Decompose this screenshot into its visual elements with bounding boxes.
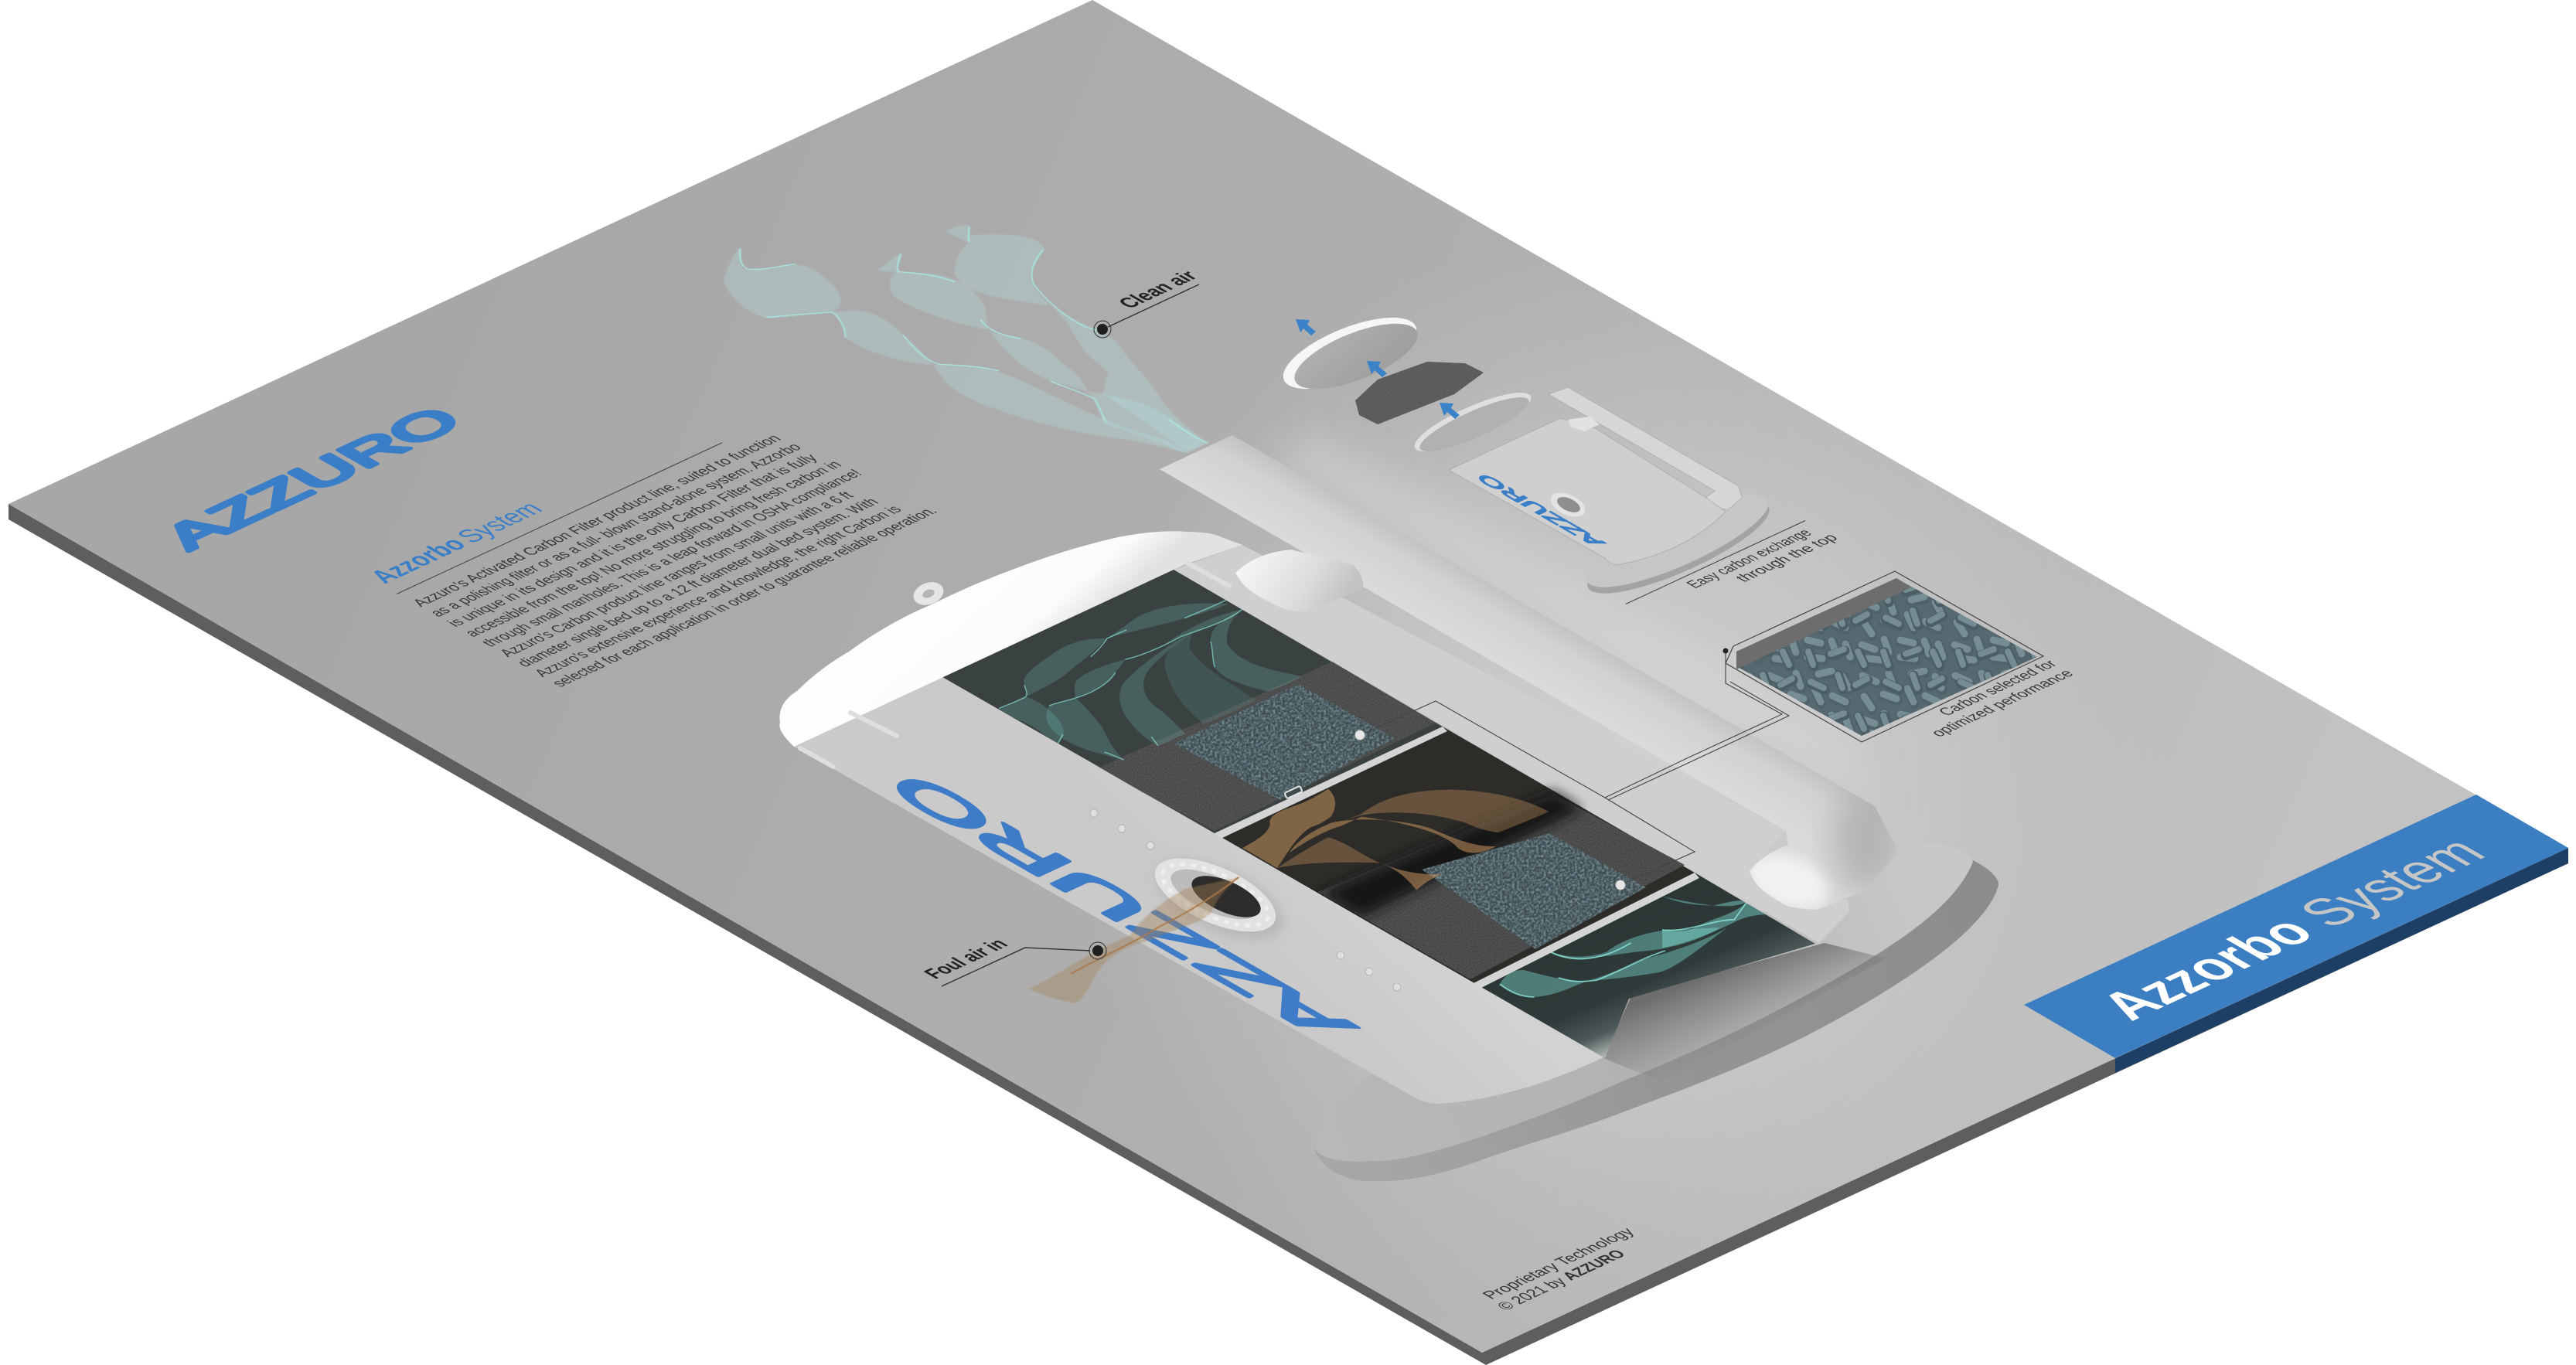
caption rule: easy carbon exchange — [1626, 521, 1805, 604]
sheet thickness: grey side edges — [9, 504, 2568, 1365]
mini carbon basket — [1355, 362, 1484, 424]
carbon pellets inset — [1726, 571, 2043, 742]
lid flange clips — [800, 563, 1229, 767]
body text block: as a polishing filter or as a full- blown stand-alone system. Azzorbo — [426, 441, 806, 619]
foul air flow middle chamber — [1242, 789, 1549, 890]
pipe to tank nozzle — [1235, 550, 1363, 612]
body text block: Azzuro's Activated Carbon Filter product line, suited to function — [409, 432, 785, 609]
heading: Azzorbo System: System — [450, 498, 549, 547]
body text block: accessible from the top! No more struggling to bring fresh carbon in — [461, 458, 846, 639]
clean air smoke plume — [724, 226, 1208, 453]
teal flow upper chamber — [999, 601, 1302, 760]
inset carbon bed wall — [1736, 578, 1911, 669]
tank dome lid — [779, 531, 1242, 767]
body text block: diameter single bed up to a 12 ft diameter dual bed system. With — [513, 495, 883, 669]
body text block: is unique in its design and it is the only Carbon Filter that is fully — [444, 451, 822, 629]
teal flow lower chamber — [1500, 897, 1770, 997]
mini pipe — [1549, 387, 1742, 510]
body text block: Azzuro's Carbon product line ranges from small units with a 6 ft — [496, 489, 857, 659]
tank base disk — [1314, 842, 1998, 1181]
heading rule — [397, 443, 722, 594]
arrow: top — [1296, 319, 1316, 335]
upper bed fabric — [1098, 662, 1436, 831]
foul air flow entering — [1029, 877, 1239, 1003]
callout: foul air in — [918, 935, 1106, 986]
body text block: selected for each application in order to guarantee reliable operation. — [548, 505, 942, 689]
lower support plate — [1474, 873, 1699, 989]
soft light along the pipe — [1268, 433, 1879, 812]
inset frame — [1726, 571, 2043, 742]
mini manway — [1547, 488, 1589, 522]
middle dark band — [1320, 791, 1582, 917]
caption: easy carbon exchange: through the top — [1732, 532, 1842, 584]
arrow: middle — [1367, 361, 1387, 377]
mini nozzle — [1568, 417, 1600, 431]
caption: carbon selected: optimized performance — [1927, 667, 2078, 739]
mini tank logo: AZZURO — [1473, 472, 1609, 549]
chamber: clean air top — [942, 570, 1443, 833]
callout: clean air: Clean air — [1113, 267, 1202, 311]
tank logo: AZZURO — [874, 768, 1368, 1047]
body text block: through small manholes. This is a leap forward in OSHA compliance! — [479, 468, 866, 649]
big vent pipe and elbow — [1160, 435, 1902, 919]
callout: clean air — [1094, 267, 1202, 338]
blue title band — [2024, 795, 2568, 1058]
blue band side edge — [2115, 848, 2568, 1073]
lower bed fabric — [1318, 794, 1685, 979]
inset picture — [1736, 578, 2037, 736]
mini top plate — [1409, 382, 1537, 462]
bottom row of bolts — [1337, 951, 1401, 991]
lower carbon block — [1422, 833, 1646, 949]
caption: easy carbon exchange: Easy carbon exchange — [1683, 527, 1816, 591]
mini tank body — [1449, 418, 1726, 565]
arrow: bottom — [1440, 403, 1460, 419]
shadow under the cutaway — [1603, 943, 1886, 1082]
mini lid — [1274, 303, 1426, 403]
upper carbon block — [1174, 684, 1395, 800]
top row of bolts — [1090, 809, 1154, 849]
chamber: clean air bottom — [1474, 873, 1815, 1058]
body text block: Azzuro's extensive experience and knowledge, the right Carbon is — [530, 503, 906, 679]
heading: Azzorbo System: Azzorbo — [363, 533, 473, 587]
foul air inlet manway — [1145, 843, 1294, 955]
tank back wall strip — [1174, 545, 1849, 943]
band title: Azzorbo — [2086, 909, 2329, 1028]
band title: System — [2285, 829, 2499, 935]
footer credit: © 2021 by AZZURO — [1493, 1247, 1630, 1313]
lid lifting lug — [910, 578, 947, 609]
upper support plate — [1215, 727, 1447, 839]
chamber: foul air middle — [1215, 727, 1695, 983]
leader lines from carbon blocks to inset — [1355, 648, 1789, 890]
mini base disk — [1577, 478, 1779, 610]
caption: carbon selected: Carbon selected for — [1935, 658, 2061, 718]
callout: foul air in: Foul air in — [918, 935, 1013, 982]
logo: AZZURO: AZZURO — [149, 400, 474, 557]
tank front shell — [794, 677, 1603, 1104]
mini tank exploded view — [1274, 303, 1779, 610]
plate latch — [1284, 786, 1303, 798]
heading: Azzorbo System — [363, 498, 549, 587]
tank interior cutaway — [942, 570, 1815, 1058]
footer credit: Proprietary Technology — [1478, 1225, 1638, 1302]
band title — [2086, 829, 2499, 1028]
